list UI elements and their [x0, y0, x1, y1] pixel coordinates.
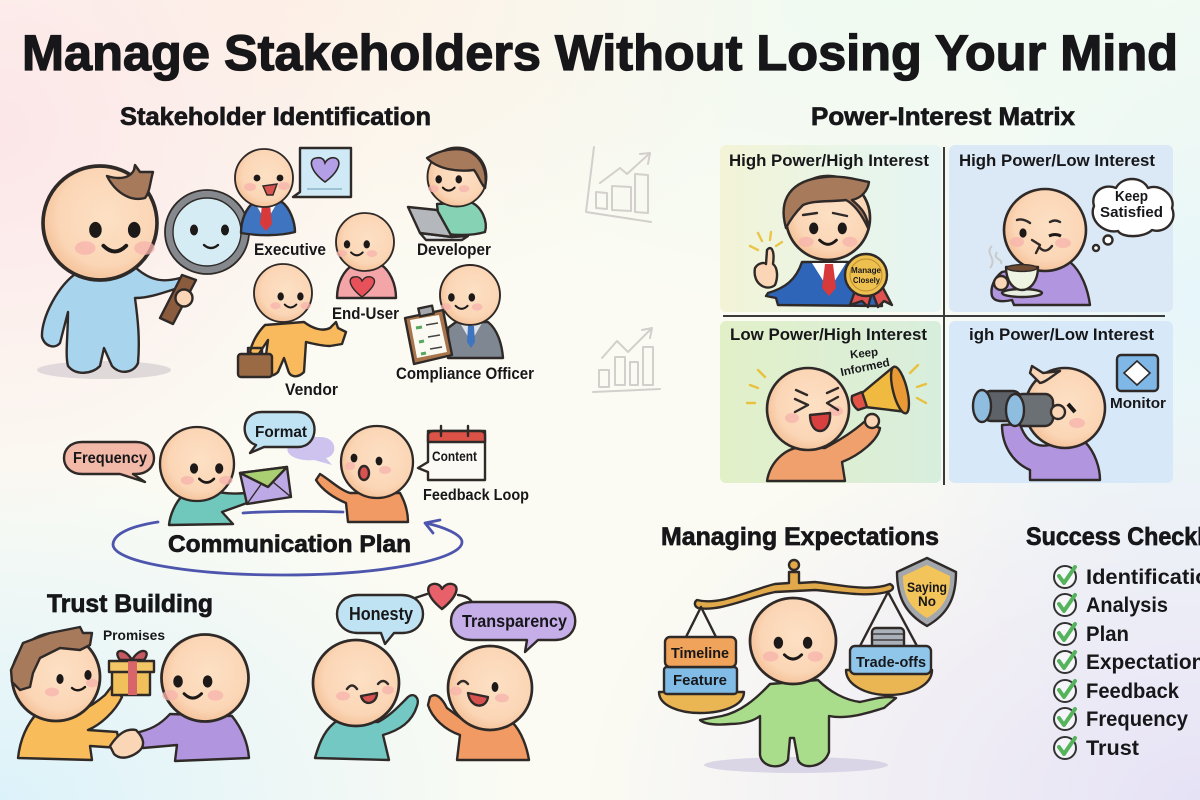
- label: feedback loop: Feedback Loop: [423, 487, 529, 504]
- check: plan: [1054, 623, 1129, 646]
- label: promises: Promises: [103, 627, 165, 643]
- icon: balance scale: Trade-offs: [856, 655, 926, 671]
- label: executive: Executive: [254, 241, 326, 259]
- icon: heart: [428, 584, 457, 609]
- figure: right communicator: [316, 426, 413, 522]
- heading: stakeholder identification: Stakeholder Identification: [120, 103, 431, 131]
- icon: shield saying no: [897, 558, 956, 626]
- heading: managing expectations: Managing Expectations: [661, 523, 939, 551]
- quadrant: low power high interest: Keep: [850, 347, 879, 361]
- icon: gift box: [109, 651, 154, 695]
- icon: calendar content: Content: [432, 449, 477, 464]
- stakeholder: executive: [235, 148, 351, 259]
- quadrant: low power high interest: [730, 325, 927, 481]
- check: trust: [1054, 737, 1139, 760]
- icon: faint line chart top: [586, 147, 651, 222]
- icon: balance scale: Feature: [673, 673, 727, 689]
- icon: shield saying no: No: [918, 593, 936, 609]
- bubble: purple small: [287, 437, 334, 465]
- icon: calendar content: [418, 426, 485, 480]
- quadrant: high power high interest: [729, 151, 929, 307]
- check: plan: Plan: [1086, 623, 1129, 646]
- panel: communication plan: [64, 412, 529, 575]
- panel: power-interest matrix: [720, 103, 1173, 485]
- quadrant: high power high interest: High Power/High Interest: [729, 151, 929, 170]
- panel: stakeholder identification: [37, 103, 535, 399]
- icon: balance scale: [659, 560, 932, 713]
- quadrant background: top right: [949, 145, 1173, 312]
- bubble: frequency: [64, 442, 154, 482]
- quadrant: low priority monitor: [969, 325, 1166, 480]
- quadrant: high power low interest: [959, 151, 1173, 305]
- icon: handshake: [110, 730, 143, 758]
- figure: person balancing scale: [700, 598, 896, 773]
- quadrant: high power high interest: Closely: [853, 275, 880, 285]
- label: compliance officer: Compliance Officer: [396, 365, 535, 383]
- icon: balance scale: Timeline: [671, 646, 729, 662]
- figure: honest person: [313, 640, 418, 760]
- quadrant: low priority monitor: igh Power/Low Interest: [969, 325, 1154, 344]
- quadrant background: top left: [720, 145, 941, 312]
- icon: envelope: [240, 467, 291, 504]
- loop arrow: [113, 511, 462, 575]
- connector lines to heart: [415, 594, 472, 602]
- stakeholder: compliance officer: [396, 265, 535, 383]
- label: developer: Developer: [417, 241, 492, 259]
- bubble: honesty: Honesty: [349, 604, 413, 624]
- heading: trust building: Trust Building: [47, 590, 213, 618]
- panel: trust building: [11, 584, 575, 761]
- check: trust: Trust: [1086, 737, 1139, 760]
- bubble: transparency: Transparency: [462, 611, 567, 631]
- bubble: frequency: Frequency: [73, 450, 147, 467]
- figure: left communicator: [160, 427, 247, 525]
- figure: person receiving: [135, 634, 249, 761]
- bubble: transparency: [451, 602, 575, 652]
- bubble: format: [245, 412, 314, 453]
- label: vendor: Vendor: [285, 381, 339, 399]
- quadrant background: bottom right: [949, 321, 1173, 483]
- check: frequency: Frequency: [1086, 708, 1188, 731]
- panel: success checklist: [1026, 523, 1200, 760]
- figure: transparent person: [428, 646, 532, 760]
- heading: communication plan: Communication Plan: [168, 531, 411, 558]
- quadrant: low power high interest: Low Power/High Interest: [730, 325, 927, 344]
- label: end-user: End-User: [332, 305, 400, 323]
- quadrant: high power low interest: Satisfied: [1100, 204, 1163, 221]
- bubble: format: Format: [255, 424, 308, 441]
- icon: faint line chart bottom: [593, 328, 660, 392]
- icon: shield saying no: Saying: [907, 579, 947, 595]
- stakeholder: vendor: [238, 264, 346, 399]
- quadrant: low power high interest: Informed: [840, 357, 891, 379]
- heading: power-interest matrix: Power-Interest Matrix: [811, 103, 1075, 131]
- bubble: honesty: [337, 595, 423, 644]
- stakeholder: developer: [408, 148, 492, 259]
- check: feedback: Feedback: [1086, 680, 1179, 703]
- quadrant: high power low interest: Keep: [1115, 188, 1148, 205]
- quadrant: high power low interest: High Power/Low Interest: [959, 151, 1155, 170]
- quadrant: high power high interest: Manage: [851, 265, 881, 275]
- check: analysis: Analysis: [1086, 594, 1168, 617]
- panel: managing expectations: [659, 523, 956, 773]
- title: Manage Stakeholders Without Losing Your Mind: [22, 25, 1178, 81]
- check: analysis: [1054, 594, 1168, 617]
- figure: person with magnifying glass: [37, 165, 249, 379]
- figure: person offering: [11, 627, 122, 760]
- label: monitor: Monitor: [1110, 395, 1166, 412]
- quadrant background: bottom left: [720, 321, 941, 483]
- stakeholder: end-user: [332, 213, 400, 323]
